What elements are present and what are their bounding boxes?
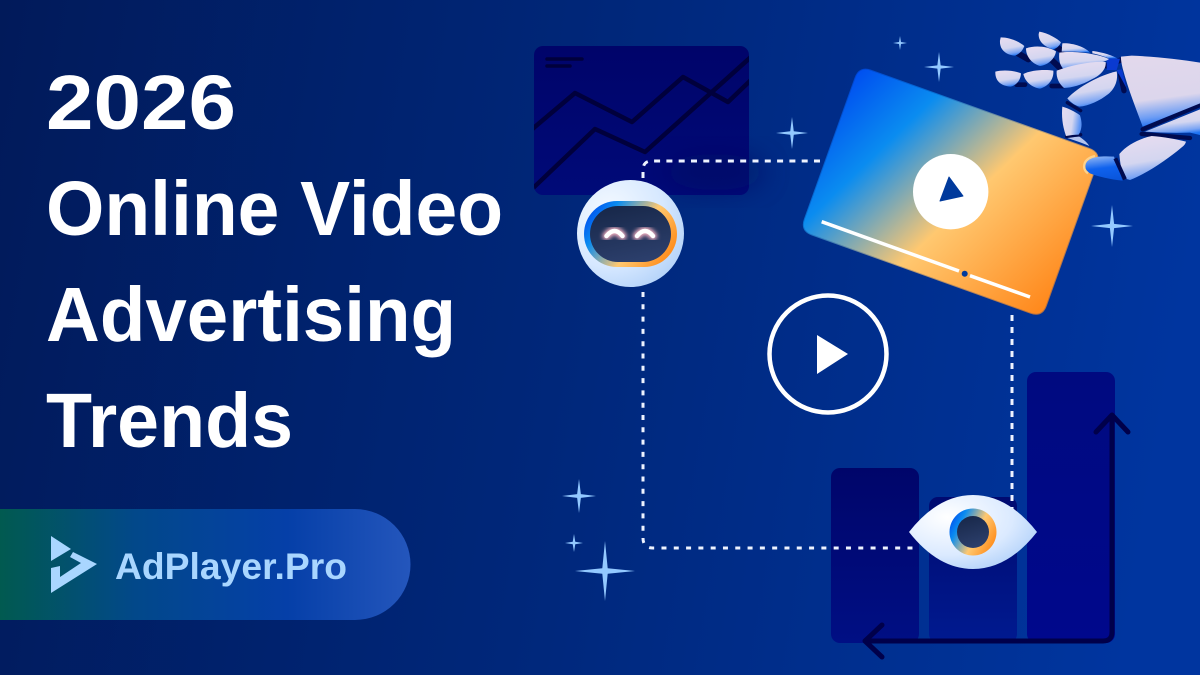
title: Online Video: [46, 166, 503, 252]
line chart card: [530, 46, 752, 195]
robot head: [577, 180, 684, 287]
arrow: chart axes: [865, 415, 1128, 657]
video card shadow: [665, 154, 765, 190]
sparkles: [562, 36, 1133, 601]
video play button: [913, 154, 988, 229]
icon: eye: [909, 495, 1037, 569]
brand name: AdPlayer.Pro: [115, 546, 347, 587]
title: Advertising: [46, 272, 456, 358]
title: 2026: [46, 60, 236, 146]
video player card: [804, 70, 1098, 314]
progress bar: [822, 222, 1030, 297]
title: Trends: [46, 378, 293, 464]
icon: AdPlayer logo: [51, 536, 97, 593]
title: [46, 60, 503, 464]
brand pill: [0, 509, 410, 620]
robot eyes: [606, 231, 653, 236]
bar chart: [831, 372, 1128, 657]
big play button: [770, 296, 886, 412]
robotic hand: [995, 32, 1200, 181]
dotted connector path: [643, 161, 1012, 548]
